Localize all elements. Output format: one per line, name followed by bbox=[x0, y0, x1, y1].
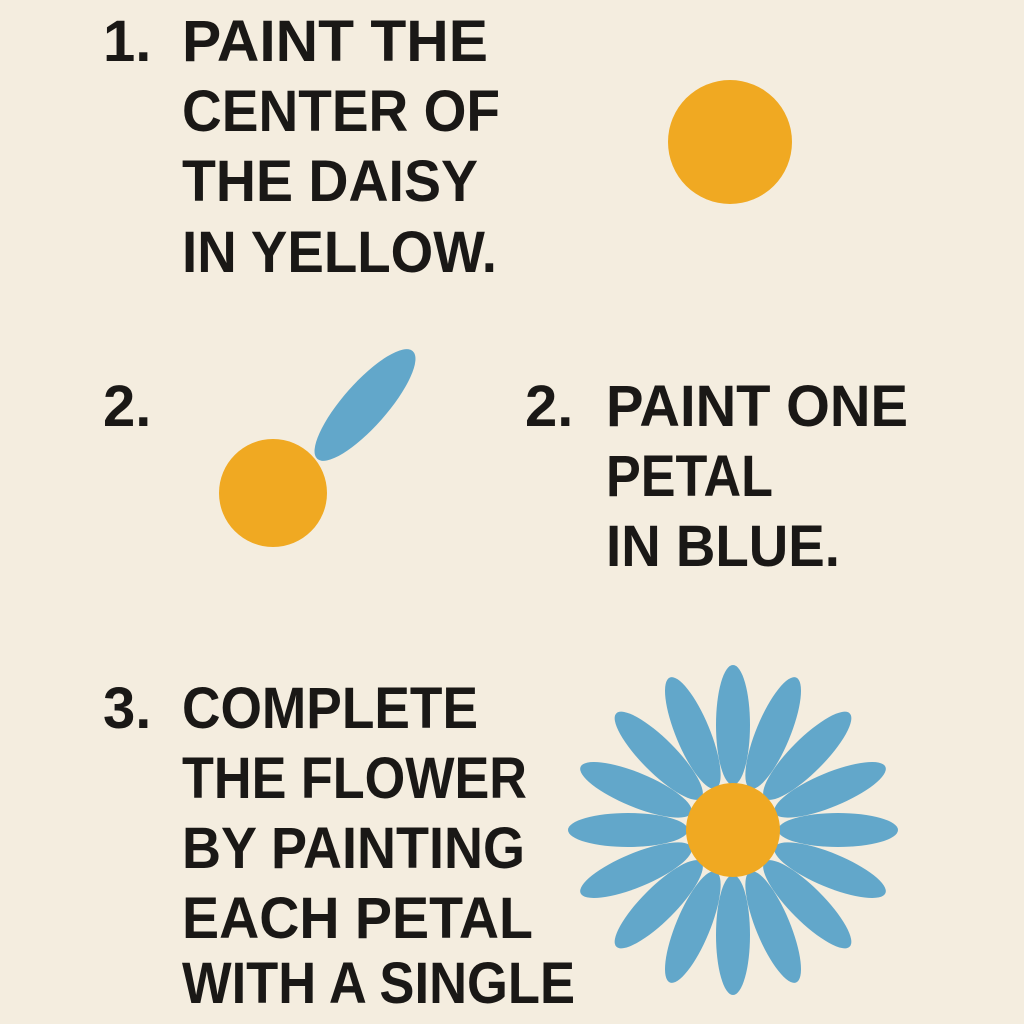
step 2 text: 2. bbox=[525, 374, 573, 439]
step 2 text: PETAL bbox=[606, 444, 773, 509]
step 1 text: PAINT THE bbox=[182, 9, 488, 74]
step 1 text: CENTER OF bbox=[182, 79, 500, 144]
step 2 text bbox=[525, 374, 908, 579]
step 1 text: THE DAISY bbox=[182, 149, 478, 214]
icon: center with one petal bbox=[219, 336, 429, 547]
step 3 text: 3. bbox=[103, 676, 151, 741]
step 3 text bbox=[103, 676, 575, 1016]
step 3 text: BY PAINTING bbox=[182, 816, 525, 881]
step 1 text: IN YELLOW. bbox=[182, 220, 497, 285]
step 2 number: 2. bbox=[103, 374, 151, 439]
step 3 text: COMPLETE bbox=[182, 676, 478, 741]
icon: yellow center circle bbox=[668, 80, 792, 204]
step 3 text: THE FLOWER bbox=[182, 746, 527, 811]
step 2 text: PAINT ONE bbox=[606, 374, 908, 439]
icon: complete daisy bbox=[568, 665, 898, 995]
step 1 text bbox=[103, 9, 500, 285]
step 1 text: 1. bbox=[103, 9, 151, 74]
step 3 text: EACH PETAL bbox=[182, 886, 533, 951]
step 3 text: WITH A SINGLE bbox=[182, 951, 575, 1016]
step 2 text: IN BLUE. bbox=[606, 514, 840, 579]
